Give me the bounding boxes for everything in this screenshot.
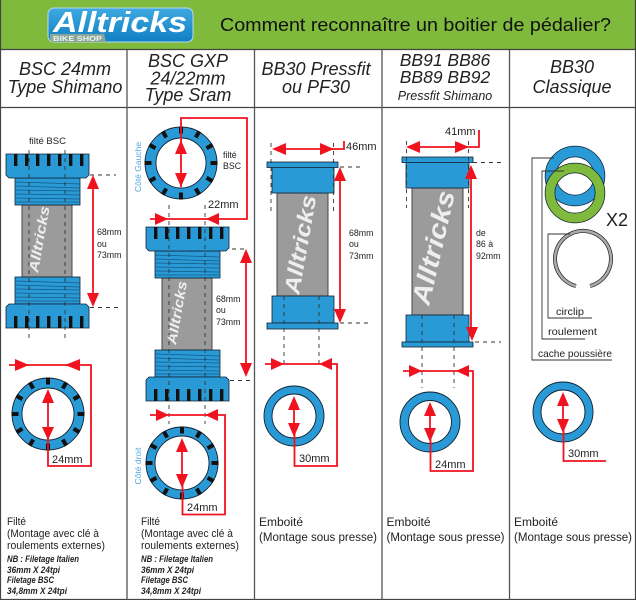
- bottom bracket: threaded, Shimano: [6, 150, 89, 340]
- leader: circlip: circlip: [556, 306, 584, 318]
- text block: Emboité, column 4: (Montage sous presse): [386, 530, 504, 544]
- heading: BB30 Classique: BB30: [550, 57, 594, 77]
- logo: Alltricks Bike Shop: Alltricks: [52, 7, 187, 39]
- label: Côté droit: Côté droit: [133, 447, 143, 484]
- panel: BSC 24mm: [6, 136, 121, 466]
- text: 68mm ou 73mm: 73mm: [349, 251, 373, 261]
- heading: BSC GXP: [145, 51, 231, 105]
- dimension: 24mm: 24mm: [435, 459, 466, 471]
- text: 68mm ou 73mm: ou: [97, 239, 107, 249]
- ring: 30mm bore: [264, 386, 324, 446]
- text block: Filté, column 1: Filté: [7, 516, 26, 528]
- ring: left side 22mm: [144, 126, 218, 200]
- ring: 24mm splined cup: [12, 378, 85, 450]
- dimension: 41mm: [406, 126, 479, 153]
- text block: Filté, column 2: roulements externes): [141, 540, 239, 552]
- text block: Filté, column 1: NB : Filetage Italien: [7, 554, 79, 564]
- leader: circlip: [548, 234, 592, 318]
- bottom bracket: press-fit PF30: Alltricks: [279, 193, 321, 297]
- heading: BSC GXP: 24/22mm: [149, 68, 226, 88]
- dimension: 22mm: 22mm: [208, 199, 239, 211]
- label: filté BSC: filté BSC: [29, 136, 67, 146]
- label: filté BSC: [223, 150, 242, 171]
- heading: BB30 Pressfit: BB30 Pressfit: [261, 59, 372, 79]
- text block: Emboité, column 5: Emboité: [514, 515, 558, 529]
- leader: cache poussière: cache poussière: [538, 348, 612, 360]
- arrow: shell width 68 or 73mm: [230, 249, 253, 380]
- ring: right side 24mm: [146, 426, 218, 500]
- text: 68mm ou 73mm: [97, 227, 121, 260]
- panel: BSC GXP: [133, 118, 253, 514]
- heading: BSC GXP: Type Sram: [145, 85, 231, 105]
- text: de 86 à 92mm: de: [476, 228, 486, 238]
- heading: BB91 BB86: BB91 BB86: [400, 50, 491, 70]
- text block: Filté, column 1: roulements externes): [7, 540, 105, 552]
- icon: bearing, green ring: [550, 168, 600, 218]
- text block: Filté, column 2: Filetage BSC: [141, 575, 188, 585]
- icon: circlip: [555, 231, 611, 286]
- text block: Emboité, column 4: [386, 515, 504, 544]
- text block: Filté, column 2: 36mm X 24tpi: [141, 565, 194, 575]
- heading: BB91 BB86: [398, 50, 492, 103]
- dimension: 24mm: [403, 365, 473, 471]
- text block: Filté, column 2: [141, 516, 239, 596]
- arrow: shell width 68 or 73mm: [334, 167, 369, 323]
- heading: BSC 24mm: [8, 59, 122, 97]
- leader: roulement: [542, 171, 597, 339]
- icon: dust cap, blue ring: [550, 152, 600, 200]
- text block: Filté, column 1: 34,8mm X 24tpi: [7, 586, 67, 596]
- text block: Emboité, column 3: [259, 515, 377, 544]
- text: 68mm ou 73mm: ou: [349, 239, 359, 249]
- leader: cache poussière: [532, 158, 612, 360]
- heading: BB30 Pressfit: ou PF30: [282, 77, 350, 97]
- title: Comment reconnaître un boitier de pédalier?: [220, 15, 611, 35]
- heading: BB91 BB86: BB89 BB92: [400, 67, 491, 87]
- label: Côté Gauche: Côté Gauche: [133, 142, 143, 192]
- dimension: 24mm: [150, 409, 225, 514]
- text: de 86 à 92mm: 86 à: [476, 239, 493, 249]
- dimension: 46mm: [272, 141, 377, 155]
- text block: Filté, column 2: NB : Filetage Italien: [141, 554, 213, 564]
- label: filté BSC: BSC: [223, 161, 242, 171]
- text: 68mm ou 73mm: [216, 294, 240, 327]
- text: 68mm ou 73mm: ou: [216, 305, 226, 315]
- dimension: 24mm: 24mm: [187, 502, 218, 514]
- heading: BB30 Classique: [532, 57, 612, 97]
- text: 68mm ou 73mm: [349, 228, 373, 261]
- dimension: 30mm: [265, 358, 337, 466]
- text block: Filté, column 2: (Montage avec clé à: [141, 528, 234, 540]
- bottom bracket: Pressfit Shimano: [402, 141, 473, 388]
- panel: BB91 BB86 BB89 BB92: [400, 126, 504, 471]
- text block: Filté, column 1: (Montage avec clé à: [7, 528, 100, 540]
- heading: BB91 BB86: Pressfit Shimano: [398, 89, 492, 103]
- heading: BSC GXP: BSC GXP: [148, 51, 228, 71]
- text block: Emboité, column 3: (Montage sous presse): [259, 530, 377, 544]
- text block: Filté, column 2: 34,8mm X 24tpi: [141, 586, 201, 596]
- bottom bracket: press-fit PF30: [267, 143, 338, 364]
- logo: Alltricks Bike Shop: BIKE SHOP: [53, 34, 102, 43]
- arrow: shell width 86 to 92mm: [465, 162, 504, 342]
- text block: Filté, column 1: [7, 516, 105, 596]
- dimension: 30mm: 30mm: [299, 453, 330, 465]
- dimension: 46mm: 46mm: [346, 141, 377, 153]
- bottom bracket: threaded, Shimano: Alltricks: [25, 205, 53, 275]
- text: 68mm ou 73mm: 73mm: [97, 250, 121, 260]
- heading: BSC 24mm: Type Shimano: [8, 77, 122, 97]
- text: de 86 à 92mm: 92mm: [476, 251, 500, 261]
- heading: BSC 24mm: BSC 24mm: [19, 59, 111, 79]
- arrow: shell width 68 or 73mm: [87, 175, 119, 308]
- dimension: 30mm: [557, 392, 606, 461]
- ring: 30mm bore: [533, 382, 593, 442]
- ring: 24mm bore: [400, 392, 460, 452]
- panel: BB30 Pressfit: [264, 141, 377, 466]
- text block: Filté, column 1: 36mm X 24tpi: [7, 565, 60, 575]
- dimension: 30mm: 30mm: [568, 448, 599, 460]
- header band: [0, 0, 636, 50]
- bottom bracket: Pressfit Shimano: Alltricks: [405, 188, 461, 308]
- text block: Filté, column 2: Filté: [141, 516, 160, 528]
- text: 68mm ou 73mm: 68mm: [349, 228, 373, 238]
- dimension: 24mm: [9, 359, 91, 466]
- dimension: 24mm: 24mm: [52, 454, 83, 466]
- text: 68mm ou 73mm: 68mm: [97, 227, 121, 237]
- leader: roulement: roulement: [548, 326, 597, 338]
- text block: Emboité, column 5: (Montage sous presse): [514, 530, 632, 544]
- text block: Emboité, column 3: Emboité: [259, 515, 303, 529]
- label: filté BSC: filté: [223, 150, 237, 160]
- panel: BB30 Classique: [532, 152, 628, 461]
- text: 68mm ou 73mm: 73mm: [216, 317, 240, 327]
- text block: Emboité, column 5: [514, 515, 632, 544]
- dimension: 41mm: 41mm: [445, 126, 476, 138]
- bottom bracket: threaded, Sram: Alltricks: [163, 279, 190, 347]
- heading: BB30 Classique: Classique: [532, 77, 612, 97]
- label: X2: X2: [606, 210, 628, 230]
- text block: Filté, column 1: Filetage BSC: [7, 575, 54, 585]
- bottom bracket: threaded, Sram: [146, 205, 229, 424]
- text: de 86 à 92mm: [476, 228, 500, 261]
- dimension: 22mm: [150, 118, 247, 225]
- text: 68mm ou 73mm: 68mm: [216, 294, 240, 304]
- text block: Emboité, column 4: Emboité: [386, 515, 431, 529]
- heading: BB30 Pressfit: [261, 59, 372, 97]
